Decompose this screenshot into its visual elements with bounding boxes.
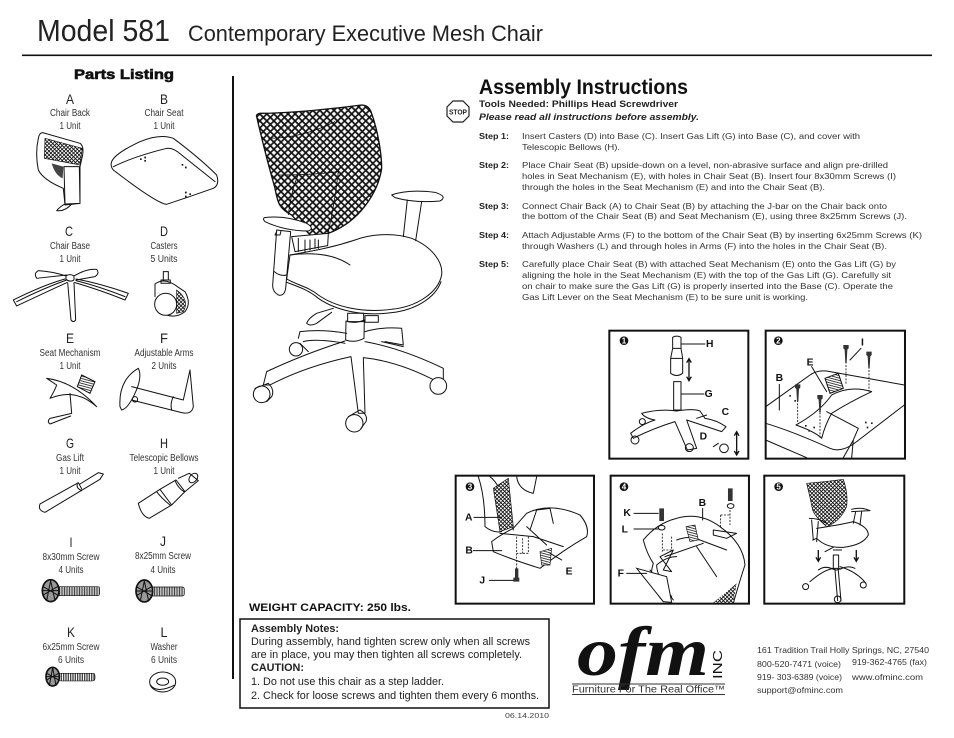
part H: telescopic bellows: H <box>160 435 168 451</box>
title <box>37 13 543 48</box>
diagram: step 1: H <box>706 339 713 350</box>
diagram: step 4: L <box>622 525 628 536</box>
step 5: Step 5: <box>479 259 509 269</box>
panel: assembly notes <box>240 619 549 708</box>
part K: 6x25mm screw: 6 Units <box>58 655 84 666</box>
part E: seat mechanism: E <box>66 330 74 346</box>
part E: seat mechanism: 1 Unit <box>60 361 81 372</box>
part D: casters: D <box>160 223 168 239</box>
diagram: step 1 <box>609 331 748 459</box>
part D: casters: Casters <box>150 241 178 252</box>
step 1: Step 1: <box>479 131 509 141</box>
step 1 <box>479 131 860 152</box>
diagram: step 3: B <box>465 546 473 557</box>
part H: telescopic bellows: 1 Unit <box>154 466 175 477</box>
part L: washer: Washer <box>150 642 178 653</box>
step 3 <box>479 201 907 221</box>
contact details: 919-362-4765 (fax) <box>852 657 927 667</box>
contact details: 800-520-7471 (voice) <box>757 659 841 669</box>
diagram: step 2: I <box>861 338 864 349</box>
step 2: holes in Seat Mechanism (E), with holes in Chair Seat (B). Insert four 8x30mm Screws (I) <box>522 171 896 181</box>
model number: Model 581 <box>37 13 170 48</box>
diagram: step 3: J <box>479 576 485 587</box>
part C: chair base <box>13 223 128 322</box>
diagram: step 2: 2 <box>776 337 781 346</box>
step 3: the bottom of the Chair Seat (B) and Seat Mechanism (E), using three 8x25mm Screws (J). <box>522 211 907 221</box>
far armrest <box>392 191 443 202</box>
part F: adjustable arms: F <box>160 330 168 346</box>
logo: OFM: ofm <box>577 614 709 691</box>
heading: Assembly Instructions <box>479 76 688 99</box>
diagram: step 3: E <box>566 567 573 578</box>
part B: chair seat <box>111 91 218 204</box>
diagram: step 5 <box>764 476 904 604</box>
part B: chair seat: 1 Unit <box>154 121 175 132</box>
gas lift lever and column <box>307 308 333 325</box>
diagram: step 2: B <box>776 373 783 384</box>
part H: telescopic bellows <box>130 435 200 518</box>
contact details: 161 Tradition Trail Holly Springs, NC, 27540 <box>757 645 929 655</box>
parts listing heading: Parts Listing <box>74 66 174 82</box>
part B: chair seat: Chair Seat <box>144 108 184 119</box>
panel: assembly notes: CAUTION: <box>251 662 304 674</box>
step 4: Attach Adjustable Arms (F) to the bottom of the Chair Seat (B) by inserting 6x25mm Screws (K) <box>522 230 922 240</box>
panel: assembly notes: 2. Check for loose screws and tighten them every 6 months. <box>251 690 539 702</box>
part I: 8x30mm screw: 4 Units <box>58 565 84 576</box>
part D: casters <box>150 223 188 316</box>
step 2: Step 2: <box>479 160 509 170</box>
diagram: step 4: K <box>623 508 631 519</box>
part I: 8x30mm screw <box>42 534 100 602</box>
logo: OFM: Furniture For The Real Office™ <box>572 684 725 696</box>
read notice: Please read all instructions before assembly. <box>479 112 699 122</box>
part F: adjustable arms: Adjustable Arms <box>134 348 194 359</box>
part D: casters: 5 Units <box>150 254 178 265</box>
step 1: Telescopic Bellows (H). <box>522 142 620 152</box>
front casters <box>253 378 447 432</box>
contact details: www.ofminc.com <box>851 672 923 682</box>
near armrest <box>263 217 311 231</box>
diagram: step 4: 4 <box>622 483 627 492</box>
step 5 <box>479 259 897 302</box>
contact details <box>757 645 929 695</box>
diagram: step 1: D <box>700 432 708 443</box>
diagram: step 4: B <box>699 498 706 509</box>
part A: chair back: 1 Unit <box>60 121 81 132</box>
panel: assembly notes: During assembly, hand tighten screw only when all screws <box>251 636 531 648</box>
diagram: step 4 <box>611 476 749 604</box>
product name: Contemporary Executive Mesh Chair <box>188 21 543 46</box>
part L: washer: 6 Units <box>151 655 177 666</box>
diagram: step 1: G <box>705 389 713 400</box>
step 5: on chair to make sure the Gas Lift (G) is properly inserted into the Base (C). Operate the <box>522 281 893 291</box>
step 4: Step 4: <box>479 230 509 240</box>
panel: assembly instructions <box>447 76 922 302</box>
part B: chair seat: B <box>160 91 168 107</box>
step 2 <box>479 160 896 192</box>
seat cushion <box>287 235 442 310</box>
five-star base <box>263 341 443 413</box>
part G: gas lift: 1 Unit <box>60 466 81 477</box>
backrest mesh <box>256 105 382 237</box>
weight capacity: WEIGHT CAPACITY: 250 lbs. <box>249 602 411 614</box>
part C: chair base: Chair Base <box>50 241 90 252</box>
part A: chair back <box>37 91 91 211</box>
contact details: support@ofminc.com <box>757 685 843 695</box>
part C: chair base: C <box>65 223 73 239</box>
diagram: step 1: C <box>722 407 730 418</box>
panel: assembly notes: are in place, you may then tighten all screws completely. <box>251 649 522 661</box>
step 2: Place Chair Seat (B) upside-down on a level, non-abrasive surface and align pre-drilled <box>522 160 888 170</box>
part G: gas lift: Gas Lift <box>56 453 84 464</box>
part A: chair back: A <box>66 91 75 107</box>
part I: 8x30mm screw: I <box>70 534 72 550</box>
part H: telescopic bellows: Telescopic Bellows <box>130 453 198 464</box>
part J: 8x25mm screw: 8x25mm Screw <box>135 551 192 562</box>
step 4 <box>479 230 922 251</box>
step 5: Carefully place Chair Seat (B) with attached Seat Mechanism (E) onto the Gas Lift (G) by <box>522 259 897 269</box>
tools needed: Tools Needed: Phillips Head Screwdriver <box>479 99 678 109</box>
icon: stop sign: STOP <box>449 108 467 116</box>
part E: seat mechanism <box>40 330 100 424</box>
rear leg and caster parts <box>298 328 403 345</box>
step 1: Insert Casters (D) into Base (C). Insert Gas Lift (G) into Base (C), and cover with <box>522 131 860 141</box>
diagram: step 1: 1 <box>622 337 627 346</box>
part L: washer <box>150 624 178 692</box>
part G: gas lift: G <box>66 435 74 451</box>
step 5: aligning the hole in the Seat Mechanism (E) with the top of the Gas Lift (G). Carefully sit <box>522 270 892 280</box>
panel: parts listing <box>13 91 218 692</box>
diagram: step 3 <box>456 476 594 604</box>
diagram: step 3: A <box>465 513 473 524</box>
step 5: Gas Lift Lever on the Seat Mechanism (E) to be sure unit is working. <box>522 292 808 302</box>
panel: assembly notes: Assembly Notes: <box>251 623 339 635</box>
date: 06.14.2010 <box>505 711 549 720</box>
diagram: step 5: 5 <box>776 483 781 492</box>
illustration: assembled mesh chair <box>253 105 447 432</box>
step 4: through Washers (L) and through holes in Arms (F) into the holes in the Chair Seat (B). <box>522 241 887 251</box>
diagram: step 3: 3 <box>468 483 473 492</box>
part E: seat mechanism: Seat Mechanism <box>40 348 100 359</box>
part F: adjustable arms: 2 Units <box>152 361 176 372</box>
step 2: through the holes in the Seat Mechanism (E) and into the Chair Seat (B). <box>522 182 825 192</box>
diagram: step 2: E <box>807 358 814 369</box>
part K: 6x25mm screw: K <box>67 624 76 640</box>
part K: 6x25mm screw: 6x25mm Screw <box>42 642 100 653</box>
part F: adjustable arms <box>120 330 194 413</box>
part L: washer: L <box>160 624 168 640</box>
panel: assembly notes: 1. Do not use this chair as a step ladder. <box>251 676 444 688</box>
part G: gas lift <box>39 435 103 512</box>
back support bracket <box>292 233 328 252</box>
logo: OFM: INC <box>711 650 725 679</box>
diagram: step 2 <box>766 331 905 459</box>
part K: 6x25mm screw <box>42 624 100 686</box>
part J: 8x25mm screw <box>135 533 192 602</box>
part A: chair back: Chair Back <box>50 108 91 119</box>
logo: OFM <box>572 614 725 696</box>
part J: 8x25mm screw: 4 Units <box>150 565 176 576</box>
contact details: 919- 303-6389 (voice) <box>757 672 842 682</box>
diagram: step 4: F <box>618 569 624 580</box>
icon: stop sign <box>447 101 469 122</box>
step 3: Step 3: <box>479 201 509 211</box>
part C: chair base: 1 Unit <box>60 254 81 265</box>
part I: 8x30mm screw: 8x30mm Screw <box>42 552 100 563</box>
part J: 8x25mm screw: J <box>160 533 166 549</box>
step 3: Connect Chair Back (A) to Chair Seat (B) by attaching the J-bar on the Chair back onto <box>522 201 887 211</box>
